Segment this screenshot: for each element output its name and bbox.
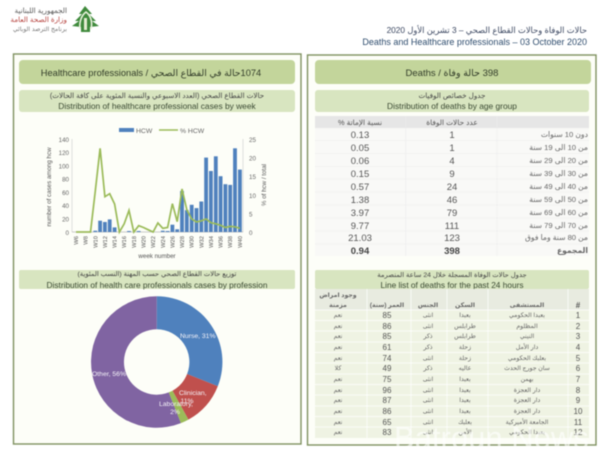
week labels: W6 (74, 236, 80, 245)
table rows: من 60 الى 69 سنة (529, 208, 588, 217)
left axis ticks (59, 137, 70, 237)
slice: nurse (157, 296, 222, 386)
left axis ticks: 80 (62, 176, 70, 184)
table header: مزمنة (329, 302, 347, 309)
table rows: 123 (444, 233, 460, 244)
table rows: 9.77 (351, 221, 369, 232)
slice: clinician (172, 374, 218, 420)
table rows: بعبدا الحكومي (509, 312, 545, 319)
table rows: نعم (334, 387, 343, 394)
subheading: cases by profession: Distribution of health care professionals cases by profession (47, 280, 268, 290)
header: ministry logo block (10, 6, 99, 33)
table rows: انثى (423, 312, 434, 319)
week labels: W8 (84, 236, 90, 245)
slice labels (92, 333, 216, 416)
panel: healthcare professionals (14, 54, 301, 444)
x axis title: week number (137, 253, 176, 260)
table rows: من 70 الى 79 سنة (529, 221, 588, 230)
table rows: نعم (334, 333, 343, 340)
table rows: الجامعة الأميركية (506, 418, 549, 426)
week labels: W24 (161, 235, 167, 248)
right axis ticks: 10 (249, 193, 256, 200)
table rows: ذكر (422, 333, 433, 340)
table rows: انثى (423, 387, 434, 394)
heading: healthcare professionals: 1074حالة في القطاع الصحي / Healthcare professionals (41, 68, 261, 78)
table rows: نعم (334, 355, 343, 362)
table rows: 10 (574, 407, 583, 416)
table rows: دون 10 سنوات (541, 130, 588, 139)
slice labels: Clinician, (179, 390, 207, 397)
subheading: deaths by age (315, 90, 589, 112)
week labels: W38 (228, 236, 234, 248)
right axis title: % of hcw / total (261, 164, 268, 206)
week labels: W28 (180, 236, 186, 248)
table rows: 1 (449, 143, 455, 154)
table rows: انثى (423, 408, 434, 415)
left axis ticks: 40 (62, 203, 70, 210)
table rows (348, 130, 588, 257)
table rows: 83 (383, 428, 392, 437)
table rows: الأمن (458, 428, 472, 436)
right axis ticks (249, 137, 256, 237)
table rows: 61 (383, 343, 392, 352)
icon: cedar tree (72, 6, 99, 32)
table rows: 7 (576, 375, 581, 384)
left axis ticks: 60 (62, 190, 70, 197)
right axis ticks: 20 (249, 156, 256, 162)
table rows: كلا (335, 365, 341, 372)
table rows: 96 (383, 386, 392, 395)
week labels (74, 235, 244, 248)
table rows: 8 (576, 386, 581, 395)
subheading: cases by profession: توزيع حالات القطاع الصحي حسب المهنة (النسب المئوية) (78, 271, 237, 278)
left axis ticks: 120 (59, 150, 70, 157)
right axis ticks: 15 (249, 174, 256, 181)
bars: weekly HCW cases (93, 148, 242, 232)
table rows: 0.06 (351, 156, 369, 167)
table rows: 65 (383, 418, 392, 427)
table rows: انثى (423, 376, 434, 383)
slice labels: Other, 56% (92, 371, 126, 378)
table rows: نعم (334, 323, 343, 330)
table rows: 1 (449, 130, 455, 141)
left axis ticks: 140 (59, 137, 70, 144)
table header: عدد حالات الوفاة (426, 118, 478, 127)
table rows: 5 (576, 354, 581, 363)
slice labels: Nurse, 31% (180, 333, 216, 340)
table rows: 21.03 (348, 233, 372, 244)
slice labels: 11% (180, 398, 194, 405)
table header: وجود امراض (319, 292, 357, 299)
table rows: نعم (334, 344, 343, 351)
table rows: نعم (334, 408, 343, 415)
week labels: W10 (93, 236, 99, 248)
table rows: بعبدا الحكومي (509, 429, 545, 436)
table rows: من 50 الى 59 سنة (529, 195, 588, 204)
table rows: دار العجزة (514, 397, 540, 404)
left axis ticks: 0 (66, 230, 70, 237)
table rows: عاليه (459, 365, 472, 372)
subheading: cases by week (19, 90, 295, 112)
table rows: من 40 الى 49 سنة (529, 182, 588, 191)
table rows: بعبدا (459, 312, 471, 319)
week labels: W30 (190, 236, 196, 248)
table rows: 0.57 (351, 182, 369, 193)
table header: العمر (سنة) (370, 302, 404, 309)
table rows: انثى (423, 355, 434, 362)
subheading: line list of deaths: جدول حالات الوفاة المسجلة خلال 24 ساعة المنصرمة (377, 272, 527, 279)
table rows: 11 (574, 418, 583, 427)
table rows: 49 (383, 364, 392, 373)
chart legend: HCW (136, 128, 153, 135)
table rows: نعم (334, 397, 343, 404)
table rows: 46 (447, 195, 457, 206)
table rows: 398 (444, 246, 460, 257)
slice labels: 2% (170, 409, 180, 416)
slice: laboratory (169, 391, 188, 423)
table rows: طرابلس (454, 333, 476, 340)
table rows: 0.13 (351, 130, 369, 141)
week labels: W40 (238, 236, 244, 248)
table rows: 87 (383, 396, 392, 405)
table rows: من 80 سنة وما فوق (525, 233, 588, 242)
table: deaths by age group (315, 116, 589, 257)
table rows: بعبدا (459, 397, 471, 404)
table rows: من 30 الى 39 سنة (529, 169, 588, 178)
table rows: نعم (334, 376, 343, 383)
table rows: 24 (447, 182, 457, 193)
table rows: 0.05 (351, 143, 369, 154)
table rows: 1.38 (351, 195, 369, 206)
left axis ticks: 100 (59, 164, 70, 170)
subheading: line list of deaths: Line list of deaths for the past 24 hours (381, 280, 523, 290)
table rows: 1 (576, 311, 581, 320)
table rows: دار العجزة (514, 387, 540, 394)
week labels: W18 (132, 236, 138, 248)
table rows: 111 (445, 221, 459, 232)
week labels: W34 (209, 235, 215, 248)
table rows: المظلوم (516, 323, 538, 330)
table rows: نعم (334, 419, 343, 426)
table rows: 79 (447, 208, 457, 219)
subheading: deaths by age: جدول خصائص الوفيات (418, 91, 486, 100)
table rows: طرابلس (454, 323, 476, 330)
table rows: بعلبك (458, 419, 472, 426)
table: line list of deaths (315, 289, 589, 438)
right axis ticks: 0 (249, 230, 253, 237)
table rows: بعبدا (459, 387, 471, 394)
table rows: انثى (423, 323, 434, 330)
panel: deaths (308, 55, 596, 445)
header: report title: حالات الوفاة وحالات القطاع الصحي – 3 تشرين الأول 2020 (387, 25, 587, 35)
week labels: W22 (151, 236, 157, 248)
table rows: انثى (423, 419, 434, 426)
left axis title: number of cases among hcw (46, 147, 53, 227)
subheading: cases by week: حالات القطاع الصحي (العدد الاسبوعي والنسبة المئوية على كافة الحالات) (50, 91, 264, 100)
heading: deaths (315, 60, 591, 84)
right axis ticks: 5 (249, 212, 253, 218)
subheading: line list of deaths (315, 270, 589, 290)
subheading: deaths by age: Distribution of deaths by age group (387, 101, 517, 111)
table rows: النيني (520, 333, 534, 340)
table rows: انثى (423, 397, 434, 404)
table rows: دار العجزة (514, 408, 540, 415)
slice labels: Laboratory, (159, 401, 193, 408)
table rows: دار الأمل (516, 343, 538, 351)
table rows: بعلبك الحكومي (508, 355, 546, 362)
table rows: 3.97 (351, 208, 369, 219)
table header: نسبة الإماتة % (338, 118, 382, 127)
table rows: ذكر (422, 344, 433, 351)
slice: other (91, 296, 181, 428)
week labels: W12 (103, 236, 109, 248)
table header: # (576, 301, 581, 310)
week labels: W16 (122, 236, 128, 248)
header: report title: Deaths and Healthcare professionals – 03 October 2020 (362, 37, 587, 47)
heading: healthcare professionals (19, 60, 295, 84)
table rows: من 20 الى 29 سنة (529, 156, 588, 165)
header: report title (362, 25, 587, 47)
chart: HCW cases per week with percent line (46, 128, 268, 260)
chart legend: % HCW (180, 128, 205, 135)
table rows: 74 (383, 354, 392, 363)
table rows (334, 311, 583, 437)
table rows: من 10 الى 19 سنة (529, 143, 588, 152)
table header (338, 118, 478, 127)
table rows: بعبدا (459, 408, 471, 415)
table rows: نعم (334, 429, 343, 436)
table rows: 86 (383, 322, 392, 331)
table header (319, 292, 581, 310)
table rows: 4 (449, 156, 455, 167)
heading: deaths: 398 حالة وفاة / Deaths (406, 68, 498, 79)
ministry name in Arabic (10, 6, 67, 33)
table rows: 6 (576, 364, 581, 373)
table rows: 9 (576, 396, 581, 405)
table rows: 85 (383, 311, 392, 320)
subheading: cases by profession (19, 270, 295, 290)
table rows: 12 (574, 428, 583, 437)
ministry name in Arabic: برنامج الترصد الوبائي (13, 26, 67, 33)
table rows: زحلة (459, 344, 471, 351)
table rows: بهمن (521, 376, 534, 383)
table header: السكن (455, 302, 475, 309)
table header: الجنس (418, 302, 438, 309)
table rows: المجموع (557, 246, 588, 255)
week labels: W14 (113, 235, 119, 248)
table rows: انثى (423, 429, 434, 436)
table rows: ذكر (422, 365, 433, 372)
table rows: 9 (449, 169, 455, 180)
table rows: 85 (383, 332, 392, 341)
chart: donut by profession (91, 296, 222, 428)
table rows: 0.94 (351, 246, 370, 257)
line: percent HCW (76, 148, 240, 232)
table rows: 2 (576, 322, 581, 331)
week labels: W36 (219, 236, 225, 248)
week labels: W26 (170, 236, 176, 248)
table rows: 4 (576, 343, 581, 352)
table rows: زحلة (459, 355, 471, 362)
table header: المستشفى (510, 302, 544, 309)
table rows: 75 (383, 375, 392, 384)
ministry name in Arabic: وزارة الصحة العامة (10, 15, 67, 24)
left axis ticks: 20 (62, 216, 70, 224)
table rows: 3 (576, 332, 581, 341)
week labels: W32 (199, 236, 205, 248)
subheading: cases by week: Distribution of healthcare professional cases by week (58, 101, 256, 111)
table rows: 0.15 (351, 169, 369, 180)
table rows: بعبدا (459, 376, 471, 383)
chart legend (119, 128, 205, 135)
table rows: 86 (383, 407, 392, 416)
table rows: نعم (334, 312, 343, 319)
week labels: W20 (142, 236, 148, 248)
ministry name in Arabic: الجمهورية اللبنانية (15, 6, 67, 15)
table rows: سان جورج الحدث (504, 365, 550, 372)
right axis ticks: 25 (249, 137, 256, 144)
